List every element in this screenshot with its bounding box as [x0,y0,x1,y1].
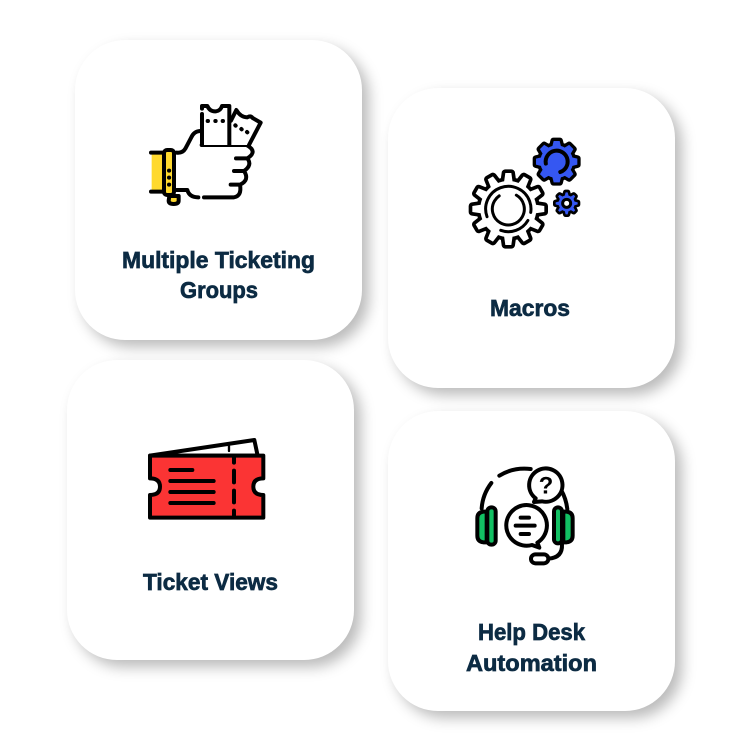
heading: help desk automation: Automation [466,650,597,676]
heading: macros: Macros [490,295,570,321]
panel: ticket views card [67,360,354,660]
icon: hand holding tickets [151,106,261,204]
big gear [472,173,544,245]
question mark: ? [539,473,553,500]
panel: macros card [388,88,675,388]
heading: multiple ticketing groups [122,247,315,303]
heading: help desk automation [466,619,597,676]
heading: ticket views: Ticket Views [143,569,278,595]
panel: multiple ticketing groups card [75,40,362,340]
blue gear [536,141,577,182]
icon: headset with chat bubbles [477,468,573,563]
panel: help desk automation card [388,411,675,711]
icon: gears [472,141,578,245]
heading: help desk automation: Help Desk [478,619,585,645]
heading: multiple ticketing groups: Multiple Ticketing [122,247,315,273]
icon: red ticket [150,440,263,518]
heading: multiple ticketing groups: Groups [180,277,258,303]
small gear [556,192,578,214]
